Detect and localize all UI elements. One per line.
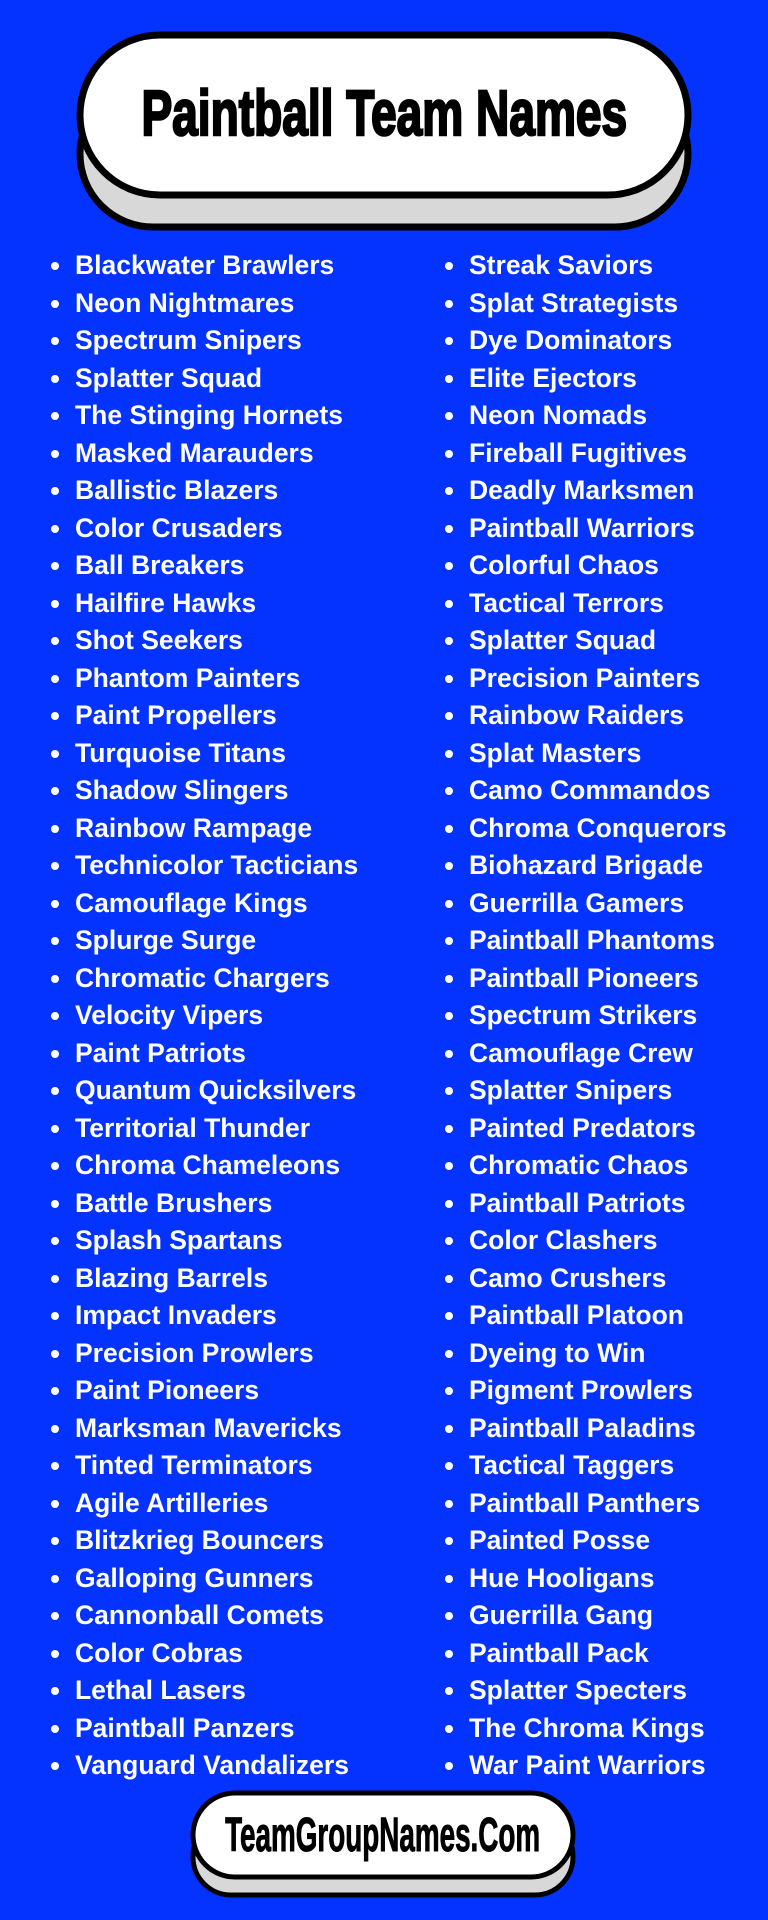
right column list: Guerrilla Gang <box>469 1600 653 1630</box>
right column list: Guerrilla Gamers <box>469 888 684 918</box>
right column list: Dye Dominators <box>469 325 672 355</box>
left column list: Ball Breakers <box>75 550 244 580</box>
title text: Paintball Team Names <box>141 77 627 149</box>
left column list: Blitzkrieg Bouncers <box>75 1525 324 1555</box>
left column list: Chromatic Chargers <box>75 962 330 992</box>
right column list: Hue Hooligans <box>469 1562 655 1592</box>
left column list: Splurge Surge <box>75 925 256 955</box>
right column list: Splatter Snipers <box>469 1075 672 1105</box>
right column list: Neon Nomads <box>469 400 647 430</box>
left column list: Vanguard Vandalizers <box>75 1750 349 1780</box>
left column list: Paint Pioneers <box>75 1375 259 1405</box>
right column list: Paintball Patriots <box>469 1188 685 1218</box>
right column list: Colorful Chaos <box>469 550 659 580</box>
left column list: Tinted Terminators <box>75 1450 313 1480</box>
left column list: Blackwater Brawlers <box>75 250 334 280</box>
left column list: Shot Seekers <box>75 625 243 655</box>
right column list: Paintball Pack <box>469 1638 649 1668</box>
right column list: Camo Commandos <box>469 775 710 805</box>
right column list: Fireball Fugitives <box>469 438 687 468</box>
left column list: The Stinging Hornets <box>75 400 343 430</box>
right column list: Paintball Paladins <box>469 1412 696 1442</box>
right column list: Splatter Squad <box>469 625 656 655</box>
left column list: Territorial Thunder <box>75 1112 310 1142</box>
right column list: Tactical Terrors <box>469 588 664 618</box>
left column list: Blazing Barrels <box>75 1262 268 1292</box>
left column list: Color Cobras <box>75 1638 243 1668</box>
left column list: Paint Propellers <box>75 700 277 730</box>
left column list: Splash Spartans <box>75 1225 283 1255</box>
right column list: Precision Painters <box>469 662 700 692</box>
left column list: Precision Prowlers <box>75 1338 314 1368</box>
left column list: Galloping Gunners <box>75 1562 314 1592</box>
right column list: The Chroma Kings <box>469 1712 705 1742</box>
right column list: Color Clashers <box>469 1225 658 1255</box>
right column list: Splatter Specters <box>469 1675 687 1705</box>
left column list: Splatter Squad <box>75 362 262 392</box>
left column list: Chroma Chameleons <box>75 1150 340 1180</box>
right column list: Deadly Marksmen <box>469 475 694 505</box>
right column list: Spectrum Strikers <box>469 1000 697 1030</box>
right column list: Pigment Prowlers <box>469 1375 693 1405</box>
left column list: Agile Artilleries <box>75 1488 268 1518</box>
left column list <box>51 250 358 1780</box>
right column list: War Paint Warriors <box>469 1750 706 1780</box>
footer text: TeamGroupNames.Com <box>225 1808 541 1862</box>
left column list: Quantum Quicksilvers <box>75 1075 356 1105</box>
right column list: Rainbow Raiders <box>469 700 684 730</box>
left column list: Velocity Vipers <box>75 1000 263 1030</box>
right column list: Painted Posse <box>469 1525 650 1555</box>
title banner <box>76 32 692 230</box>
left column list: Marksman Mavericks <box>75 1412 342 1442</box>
left column list: Technicolor Tacticians <box>75 850 358 880</box>
right column list: Paintball Warriors <box>469 512 695 542</box>
right column list: Paintball Panthers <box>469 1488 700 1518</box>
right column list: Painted Predators <box>469 1112 696 1142</box>
left column list: Hailfire Hawks <box>75 588 256 618</box>
right column list: Elite Ejectors <box>469 362 637 392</box>
left column list: Turquoise Titans <box>75 738 286 768</box>
right column list: Paintball Pioneers <box>469 962 699 992</box>
left column list: Battle Brushers <box>75 1188 272 1218</box>
right column list: Biohazard Brigade <box>469 850 703 880</box>
left column list: Paintball Panzers <box>75 1712 294 1742</box>
right column list <box>445 250 727 1780</box>
left column list: Cannonball Comets <box>75 1600 324 1630</box>
left column list: Rainbow Rampage <box>75 812 312 842</box>
left column list: Shadow Slingers <box>75 775 289 805</box>
left column list: Masked Marauders <box>75 438 314 468</box>
left column list: Lethal Lasers <box>75 1675 246 1705</box>
right column list: Chroma Conquerors <box>469 812 727 842</box>
left column list: Neon Nightmares <box>75 288 294 318</box>
right column list: Camo Crushers <box>469 1262 666 1292</box>
right column list: Splat Strategists <box>469 288 678 318</box>
left column list: Ballistic Blazers <box>75 475 278 505</box>
footer banner <box>190 1790 576 1898</box>
right column list: Paintball Phantoms <box>469 925 715 955</box>
left column list: Spectrum Snipers <box>75 325 302 355</box>
right column list: Tactical Taggers <box>469 1450 674 1480</box>
left column list: Camouflage Kings <box>75 888 308 918</box>
right column list: Streak Saviors <box>469 250 653 280</box>
right column list: Splat Masters <box>469 738 641 768</box>
left column list: Phantom Painters <box>75 662 300 692</box>
left column list: Color Crusaders <box>75 512 283 542</box>
left column list: Impact Invaders <box>75 1300 277 1330</box>
right column list: Dyeing to Win <box>469 1338 645 1368</box>
left column list: Paint Patriots <box>75 1038 246 1068</box>
right column list: Chromatic Chaos <box>469 1150 688 1180</box>
right column list: Paintball Platoon <box>469 1300 684 1330</box>
right column list: Camouflage Crew <box>469 1038 693 1068</box>
